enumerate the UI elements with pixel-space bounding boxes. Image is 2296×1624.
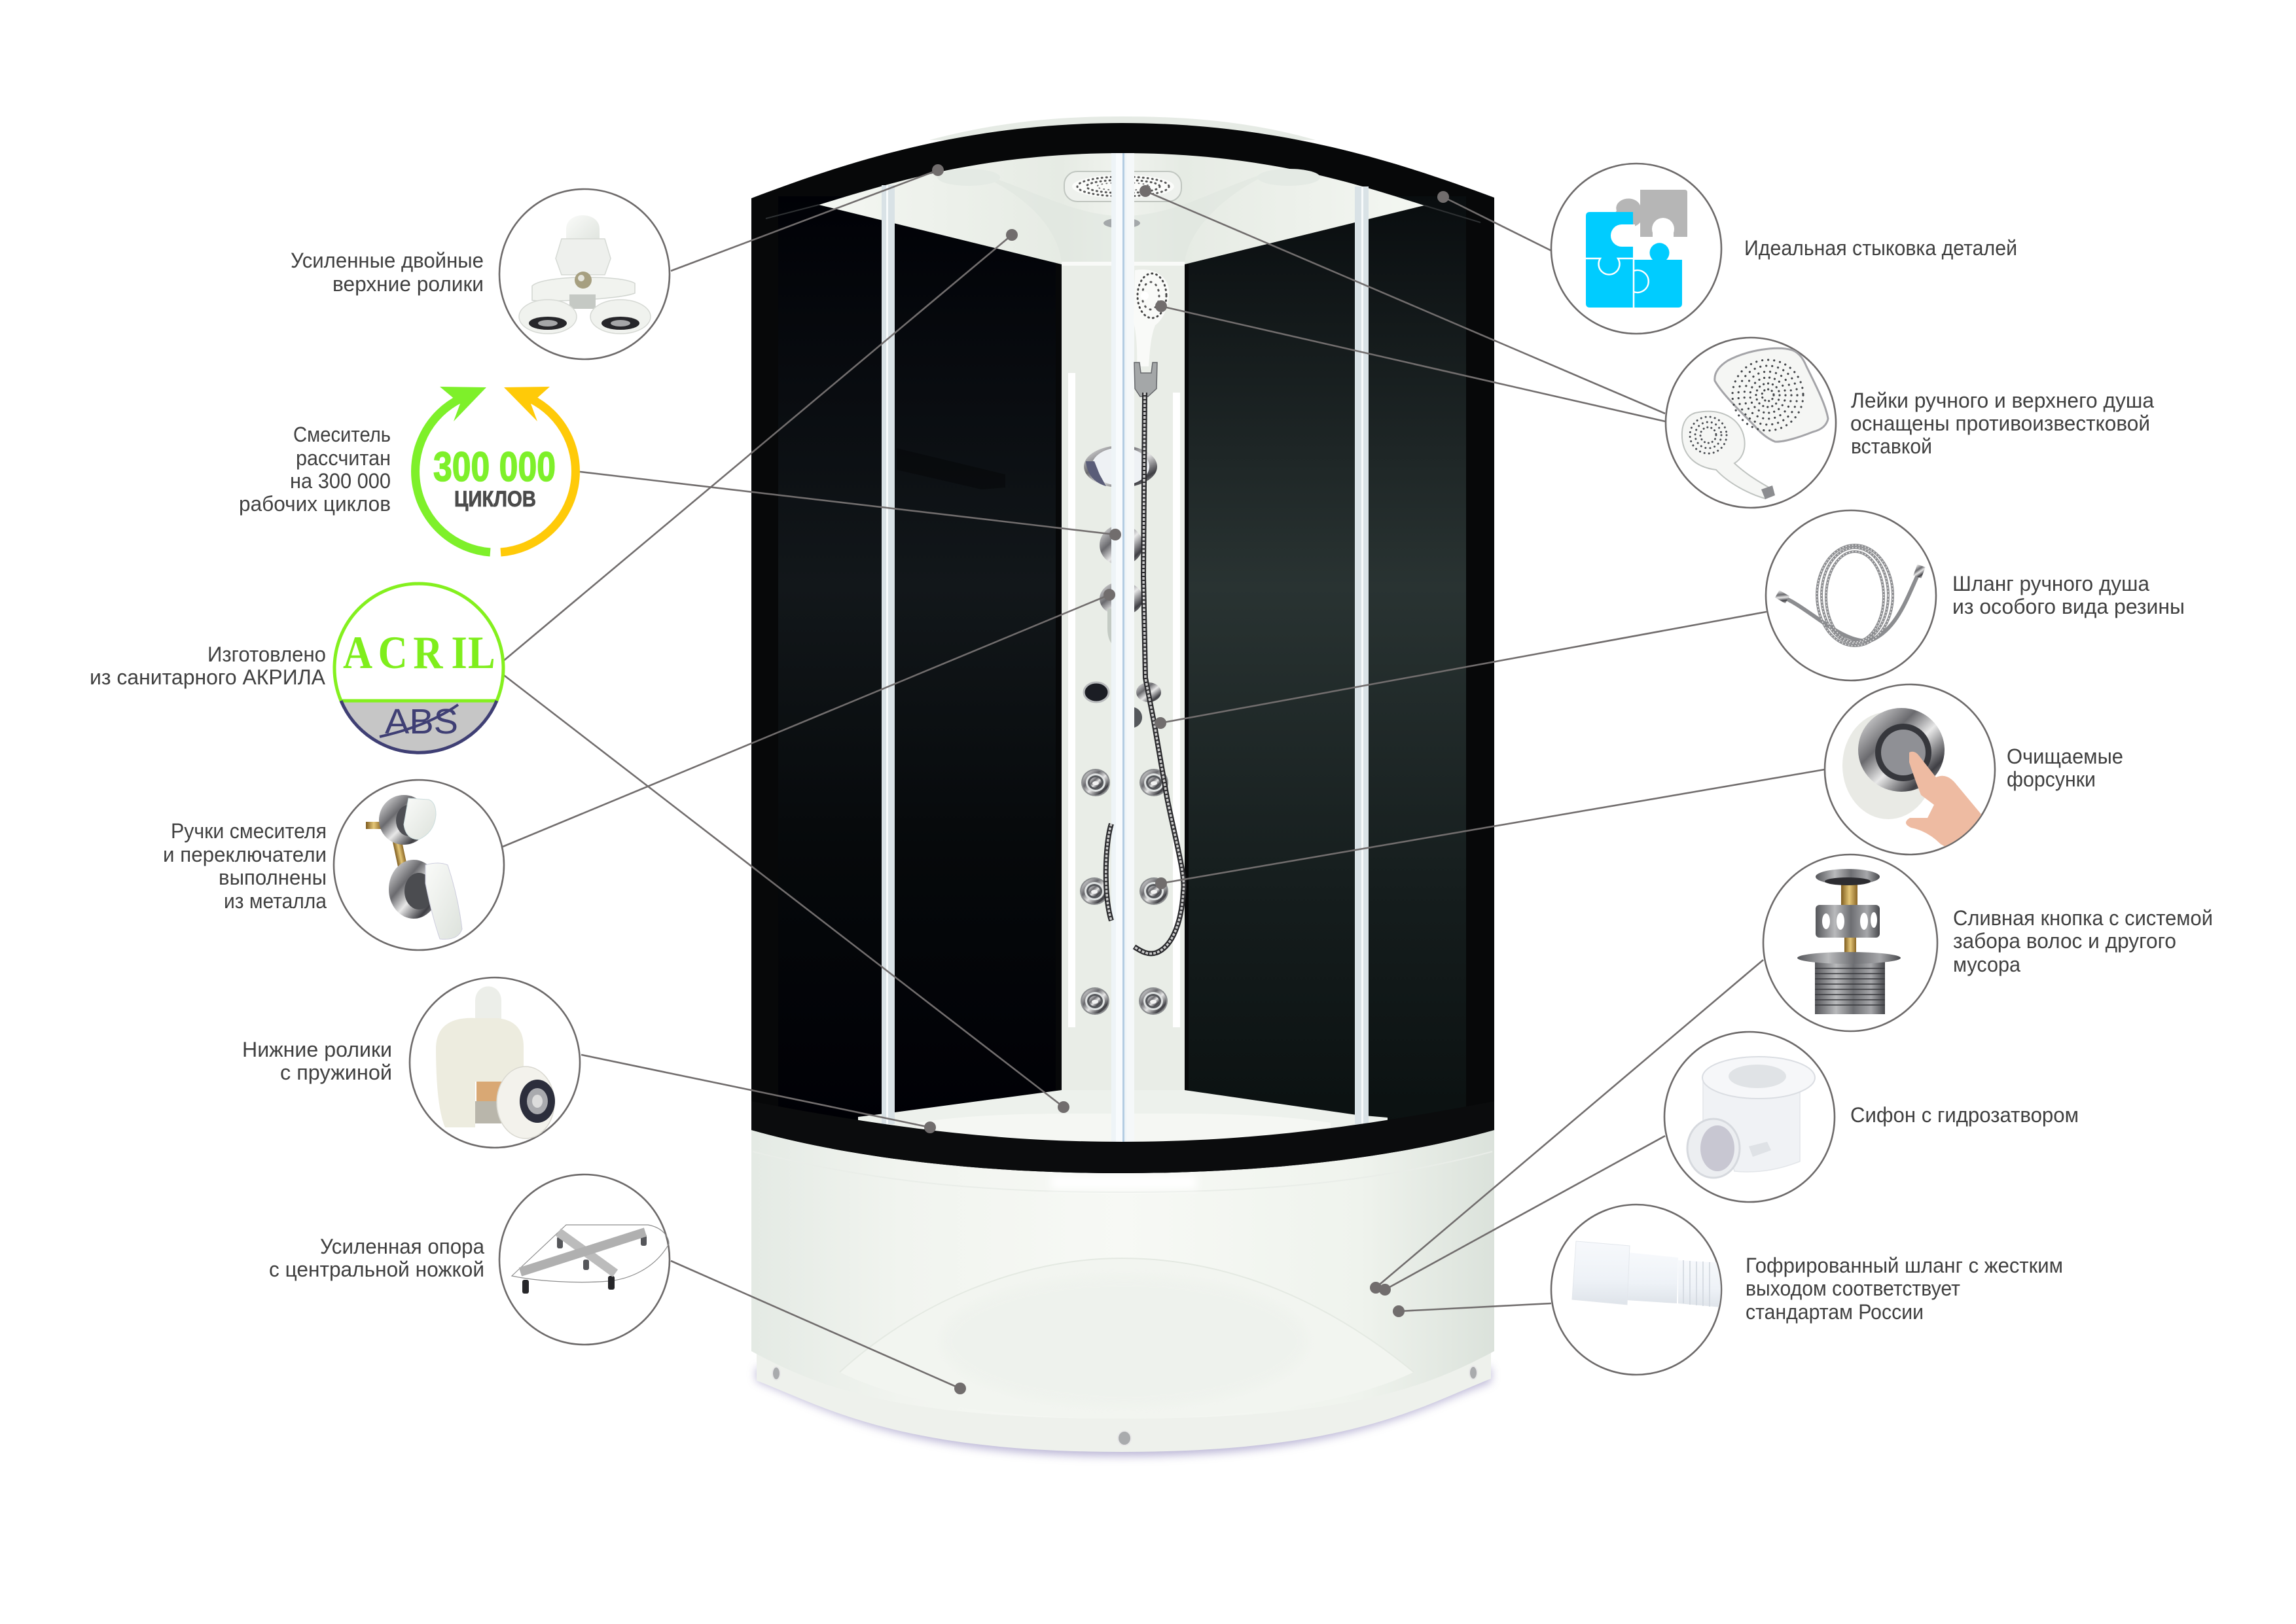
right back panel bbox=[1189, 196, 1466, 1125]
leader: puzzle joint bbox=[1437, 191, 1551, 251]
label: рабочих циклов bbox=[239, 492, 391, 516]
icon: support frame bbox=[512, 1225, 669, 1294]
ceiling speaker left bbox=[937, 169, 1000, 186]
frame inner edges bbox=[766, 205, 1480, 222]
label bbox=[2007, 745, 2123, 791]
leader: drain bbox=[1370, 960, 1763, 1294]
label: выходом соответствует bbox=[1746, 1277, 1960, 1300]
circle bbox=[1766, 510, 1936, 680]
bottom black sill bbox=[751, 1101, 1494, 1173]
icon: mixer handles bbox=[366, 795, 462, 939]
label: из металла bbox=[224, 889, 327, 913]
shelf shadow bbox=[897, 448, 1005, 489]
label: и переключатели bbox=[163, 843, 327, 866]
label: вставкой bbox=[1851, 434, 1932, 458]
label: с пружиной bbox=[280, 1061, 392, 1084]
callout: 300 000 cycles bbox=[239, 387, 575, 552]
shower cabin bbox=[751, 116, 1494, 1456]
label: Смеситель bbox=[293, 423, 391, 446]
hand shower bbox=[1134, 270, 1169, 397]
left back panel bbox=[778, 196, 1056, 1125]
label: оснащены противоизвестковой bbox=[1850, 412, 2150, 435]
label bbox=[163, 819, 327, 913]
label: Очищаемые bbox=[2007, 745, 2123, 768]
label: из особого вида резины bbox=[1952, 595, 2185, 618]
overhead shower bbox=[1064, 171, 1181, 202]
floor of tray bbox=[858, 1090, 1388, 1142]
label: Идеальная стыковка деталей bbox=[1744, 236, 2017, 260]
label: стандартам России bbox=[1746, 1300, 1924, 1324]
tub base plinth bbox=[757, 1348, 1491, 1452]
label: мусора bbox=[1953, 953, 2020, 976]
door rail centre bbox=[1111, 153, 1134, 1142]
icon: green arrow arc bbox=[416, 387, 490, 552]
cycles word: ЦИКЛОВ bbox=[454, 487, 536, 512]
label: Лейки ручного и верхнего душа bbox=[1851, 389, 2154, 412]
callout: shower hose bbox=[1766, 510, 2185, 680]
tub upper edge crease bbox=[753, 1152, 1492, 1192]
door rail right bbox=[1355, 186, 1369, 1124]
label bbox=[242, 1038, 392, 1084]
circle bbox=[1551, 164, 1721, 334]
circle bbox=[1763, 855, 1937, 1031]
mixer handle bbox=[1100, 582, 1143, 643]
label bbox=[1953, 906, 2213, 976]
leader lines and markers bbox=[503, 164, 1825, 1394]
callout: perfect joint bbox=[1551, 164, 2017, 334]
mixer knob bbox=[1100, 525, 1143, 565]
callout: reinforced support bbox=[269, 1174, 670, 1345]
icon: overhead head bbox=[1715, 348, 1828, 442]
label: Ручки смесителя bbox=[171, 819, 327, 843]
shower hose bbox=[1106, 393, 1184, 953]
main thermostat mixer bbox=[1084, 446, 1157, 487]
ceiling speaker right bbox=[1257, 169, 1320, 186]
label: на 300 000 bbox=[290, 469, 391, 493]
leader: lower rollers bbox=[581, 1055, 936, 1133]
label: выполнены bbox=[219, 866, 327, 889]
body jets bbox=[1080, 682, 1168, 1015]
callout: cleanable nozzles bbox=[1825, 684, 2123, 857]
tub inner dome shade bbox=[941, 1276, 1308, 1407]
icon: yellow arrow arc bbox=[501, 387, 575, 552]
label: Гофрированный шланг с жестким bbox=[1746, 1254, 2063, 1277]
label: форсунки bbox=[2007, 768, 2096, 791]
label bbox=[239, 423, 391, 516]
leader: overhead shower head bbox=[1139, 185, 1665, 414]
label bbox=[1952, 572, 2185, 618]
leader: acrylic ceiling bbox=[503, 229, 1018, 662]
tub dome outline bbox=[840, 1258, 1414, 1372]
label: Сливная кнопка с системой bbox=[1953, 906, 2213, 930]
ceiling bbox=[819, 153, 1424, 264]
icon: hand head bbox=[1682, 412, 1775, 499]
icon: double roller bbox=[519, 215, 651, 334]
circle bbox=[499, 189, 670, 359]
callout: acrylic bbox=[90, 584, 503, 752]
label: Нижние ролики bbox=[242, 1038, 392, 1061]
circle bbox=[1666, 338, 1836, 508]
circle bbox=[1825, 684, 1995, 855]
leader: mixer cycles bbox=[580, 472, 1121, 540]
icon: puzzle bbox=[1586, 190, 1687, 308]
icon: drain bbox=[1797, 869, 1901, 1014]
ceiling trumpet shading bbox=[969, 170, 1276, 264]
callout: drain button bbox=[1763, 855, 2213, 1031]
tub top highlight bbox=[1051, 1176, 1196, 1189]
label bbox=[1850, 389, 2154, 458]
label: рассчитан bbox=[296, 446, 391, 470]
callout: upper rollers bbox=[291, 189, 670, 359]
circle bbox=[1551, 1205, 1721, 1375]
callout: siphon bbox=[1664, 1032, 2079, 1202]
callout: corrugated hose bbox=[1551, 1205, 2063, 1375]
column light strips bbox=[1062, 262, 1185, 1027]
tub feet caps bbox=[772, 1366, 1477, 1445]
tray bowl bbox=[916, 1114, 1331, 1145]
label: Шланг ручного душа bbox=[1952, 572, 2149, 595]
leader: siphon bbox=[1379, 1136, 1665, 1296]
central column bbox=[1062, 262, 1185, 1093]
leader: hose bbox=[1155, 612, 1767, 729]
icon: spring roller bbox=[436, 987, 555, 1139]
label: с центральной ножкой bbox=[269, 1258, 484, 1281]
icon: coiled hose bbox=[1775, 545, 1926, 646]
icon: nozzle with hand bbox=[1842, 708, 1982, 847]
cycles number: 300 000 bbox=[433, 444, 556, 490]
leader: hand shower head bbox=[1155, 300, 1665, 421]
leader: nozzles bbox=[1155, 769, 1825, 889]
leader: acrylic tray bbox=[504, 675, 1069, 1113]
leader: upper rollers bbox=[671, 164, 944, 271]
leader: metal handles bbox=[503, 589, 1115, 847]
label: из санитарного АКРИЛА bbox=[90, 665, 326, 689]
leader: support bbox=[671, 1261, 966, 1394]
ceiling lamp bbox=[1103, 218, 1140, 228]
label bbox=[1746, 1254, 2063, 1324]
circle bbox=[1664, 1032, 1835, 1202]
badge: ABS bbox=[385, 702, 458, 741]
door rail left bbox=[882, 185, 895, 1124]
black frame bbox=[751, 123, 1494, 1173]
leader: corrugated hose bbox=[1393, 1303, 1551, 1317]
label: Изготовлено bbox=[207, 643, 326, 666]
tub centre dome bbox=[840, 1258, 1414, 1419]
label: верхние ролики bbox=[332, 272, 484, 296]
tub shadow bbox=[757, 1368, 1491, 1456]
label: Усиленные двойные bbox=[291, 249, 484, 272]
icon: siphon bbox=[1687, 1057, 1815, 1178]
badge: ACRIL bbox=[343, 627, 495, 679]
tub front panel bbox=[751, 1112, 1494, 1419]
label: забора волос и другого bbox=[1953, 929, 2176, 953]
top pale rim bbox=[929, 116, 1316, 140]
icon: corrugated pipe bbox=[1572, 1241, 1722, 1307]
label bbox=[269, 1235, 484, 1281]
label: Усиленная опора bbox=[320, 1235, 484, 1258]
circle bbox=[334, 780, 504, 950]
circle bbox=[499, 1174, 670, 1345]
badge bbox=[334, 584, 503, 752]
callout: metal handles bbox=[163, 780, 504, 950]
callout: lower rollers bbox=[242, 978, 580, 1148]
circle bbox=[410, 978, 580, 1148]
callout: shower heads bbox=[1666, 338, 2154, 508]
label: Сифон с гидрозатвором bbox=[1850, 1103, 2079, 1127]
label bbox=[291, 249, 484, 296]
label bbox=[90, 643, 326, 689]
